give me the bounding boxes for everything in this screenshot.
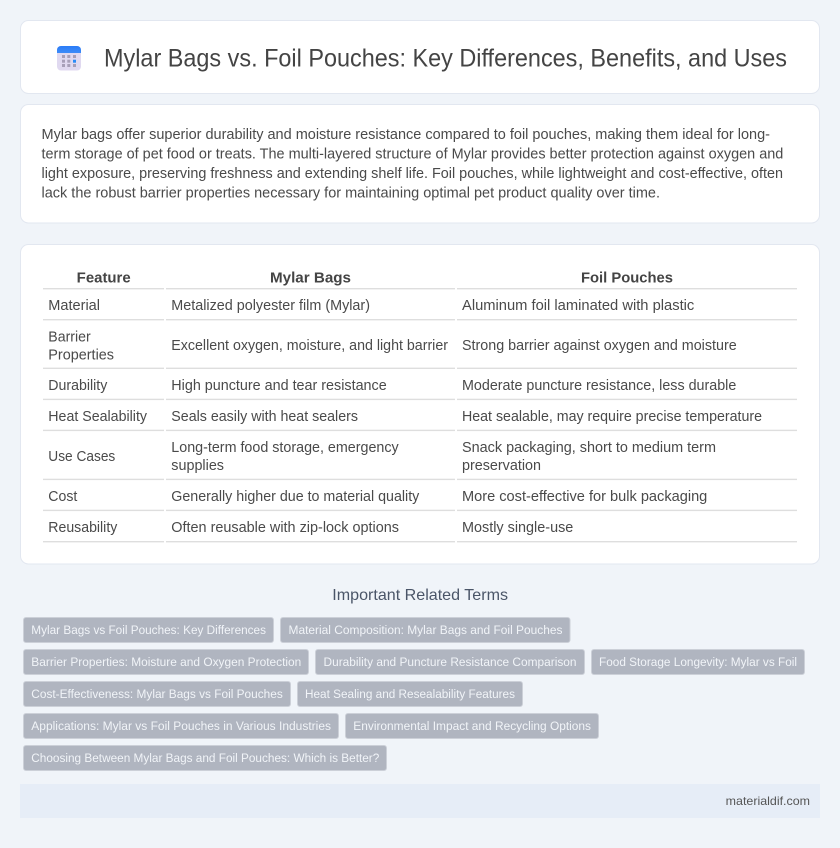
tag <box>24 714 338 738</box>
row: use cases <box>48 440 716 474</box>
row: barrier properties: Strong barrier against oxygen and moisture <box>462 338 737 354</box>
table header row <box>77 271 673 287</box>
row: durability: High puncture and tear resistance <box>171 378 387 394</box>
panel: comparison table <box>20 244 820 564</box>
tag <box>592 650 804 674</box>
tag: Durability and Puncture Resistance Comparison <box>324 655 577 669</box>
row: use cases: Snack packaging, short to medium term <box>462 440 716 456</box>
row: durability: Moderate puncture resistance, less durable <box>462 378 736 394</box>
tag <box>24 682 290 706</box>
icon: calendar <box>57 46 81 70</box>
tag: Applications: Mylar vs Foil Pouches in Various Industries <box>31 719 331 733</box>
row: use cases: preservation <box>462 458 541 474</box>
row: use cases: Use Cases <box>48 449 115 465</box>
title: Mylar Bags vs. Foil Pouches: Key Differences, Benefits, and Uses <box>104 45 787 73</box>
tag: Cost-Effectiveness: Mylar Bags vs Foil Pouches <box>31 687 283 701</box>
row: barrier properties: Excellent oxygen, moisture, and light barrier <box>171 338 448 354</box>
row: material: Aluminum foil laminated with plastic <box>462 298 694 314</box>
row: reusability: Mostly single-use <box>462 520 573 536</box>
text block: intro: Mylar bags offer superior durability and moisture resistance compared to foil pouches, making them ideal for long- <box>42 127 770 143</box>
row: heat sealability: Seals easily with heat sealers <box>171 409 358 425</box>
tag <box>298 682 522 706</box>
row: cost <box>48 489 707 505</box>
table header row: Feature <box>77 271 131 287</box>
row: durability <box>48 378 736 394</box>
row: reusability: Reusability <box>48 520 118 536</box>
table header row: Mylar Bags <box>270 271 351 287</box>
row: use cases: Long-term food storage, emergency <box>171 440 399 456</box>
row: material: Material <box>48 298 100 314</box>
row: barrier properties: Properties <box>48 347 114 363</box>
panel: intro paragraph <box>20 104 820 223</box>
row: barrier properties: Barrier <box>48 330 91 346</box>
row: durability: Durability <box>48 378 108 394</box>
tag <box>24 746 386 770</box>
text block: intro: light exposure, preserving freshness and extending shelf life. Foil pouches, while lightweight and cost-effective, often <box>42 166 783 182</box>
tag <box>316 650 584 674</box>
row: reusability: Often reusable with zip-lock options <box>171 520 399 536</box>
row: reusability <box>48 520 573 536</box>
row: barrier properties <box>48 330 737 363</box>
tag: Choosing Between Mylar Bags and Foil Pouches: Which is Better? <box>31 751 379 765</box>
tag: Environmental Impact and Recycling Options <box>353 719 591 733</box>
table header row: Foil Pouches <box>581 271 673 287</box>
row: heat sealability: Heat Sealability <box>48 409 148 425</box>
footer source text: materialdif.com <box>726 794 810 808</box>
tag: Food Storage Longevity: Mylar vs Foil <box>599 655 797 669</box>
panel: header <box>20 20 820 94</box>
tag: Mylar Bags vs Foil Pouches: Key Differences <box>31 623 266 637</box>
row: cost: Generally higher due to material quality <box>171 489 420 505</box>
tag <box>346 714 598 738</box>
row: cost: More cost-effective for bulk packaging <box>462 489 707 505</box>
tag <box>24 650 308 674</box>
text block: intro: term storage of pet food or treats. The multi-layered structure of Mylar provides better protection against oxygen and <box>42 146 783 162</box>
row: use cases: supplies <box>171 458 224 474</box>
heading: important related terms: Important Related Terms <box>332 587 508 604</box>
row: cost: Cost <box>48 489 77 505</box>
tag <box>280 618 570 642</box>
row: material <box>48 298 694 314</box>
footer <box>20 784 820 818</box>
row: heat sealability <box>48 409 762 425</box>
text block: intro: lack the robust barrier properties necessary for maintaining optimal pet product quality over time. <box>42 185 660 201</box>
row: heat sealability: Heat sealable, may require precise temperature <box>462 409 762 425</box>
tag: Heat Sealing and Resealability Features <box>305 687 515 701</box>
tag <box>24 618 274 642</box>
panel: related term tags <box>24 618 804 770</box>
text block: intro <box>42 127 783 201</box>
tag: Barrier Properties: Moisture and Oxygen Protection <box>31 655 301 669</box>
row: material: Metalized polyester film (Mylar) <box>171 298 370 314</box>
tag: Material Composition: Mylar Bags and Foil Pouches <box>288 623 562 637</box>
